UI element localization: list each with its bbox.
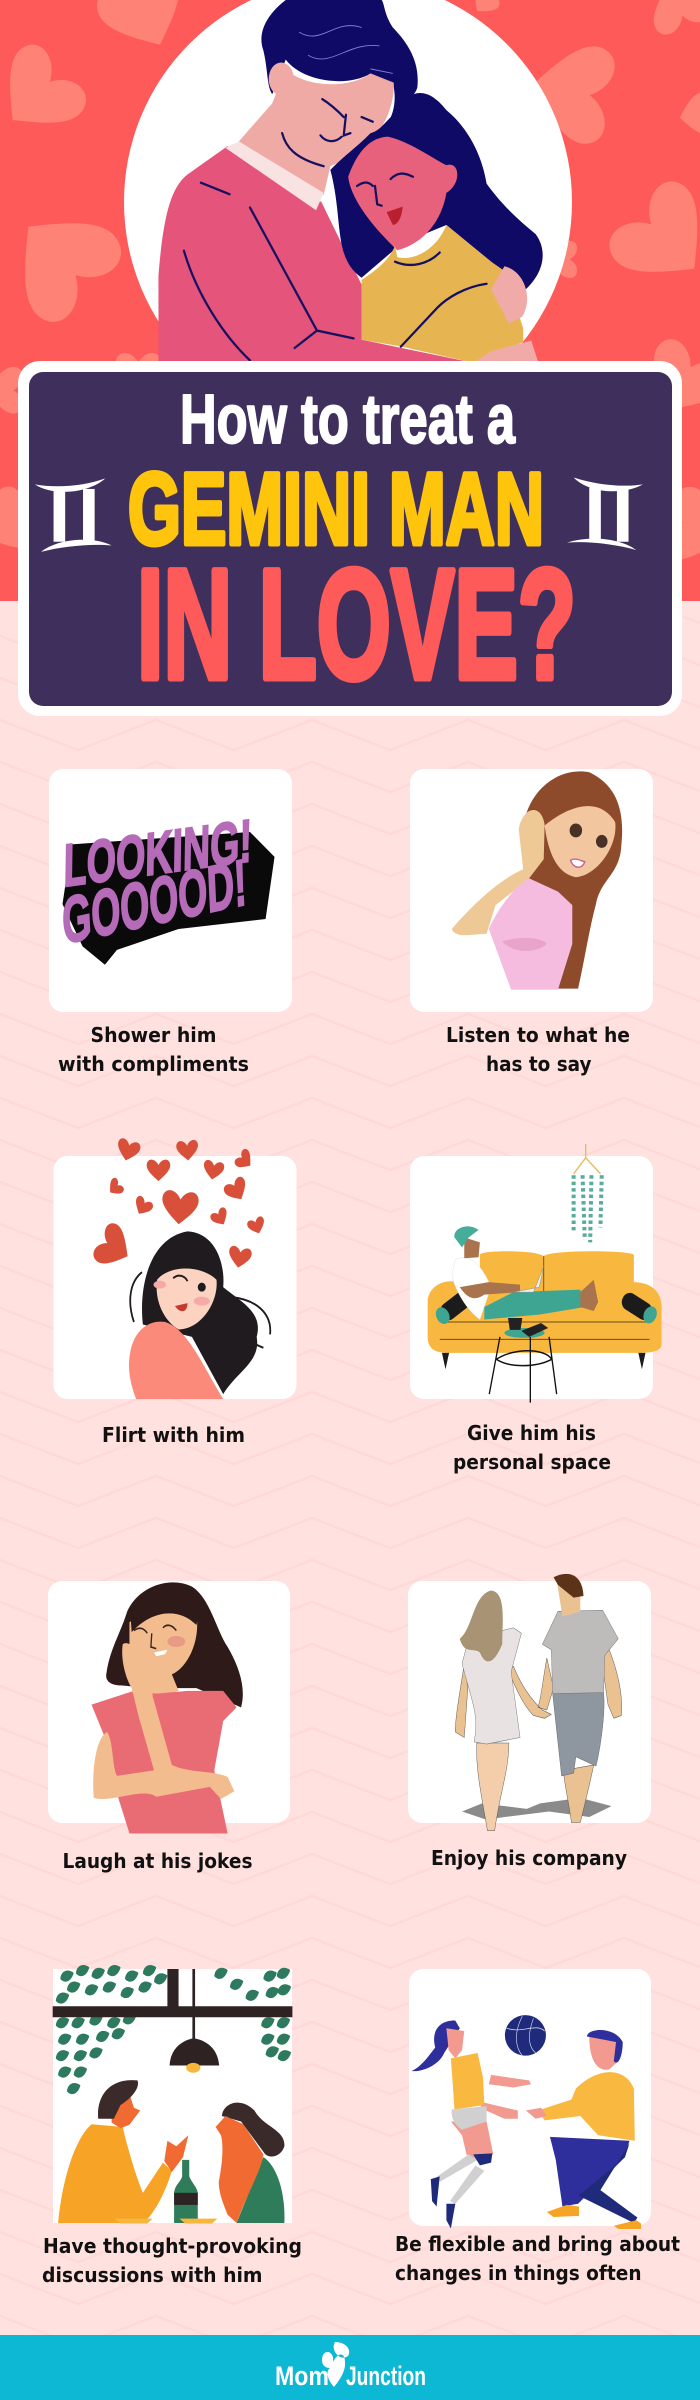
man's hair strands xyxy=(299,26,393,73)
face xyxy=(157,1268,217,1329)
line details xyxy=(184,99,487,360)
illustration: playing volleyball xyxy=(412,2015,641,2229)
bottle xyxy=(174,2160,198,2223)
caption: Have thought-provoking discussions with him: Have thought-provoking xyxy=(43,2234,302,2258)
card: company xyxy=(408,1574,651,1831)
header red background with hearts xyxy=(0,0,700,601)
card: compliments xyxy=(49,769,292,1012)
hanging plant xyxy=(574,1175,602,1242)
man xyxy=(452,1258,491,1319)
table xyxy=(504,1328,545,1338)
man's hands xyxy=(473,266,538,363)
illustration: man on sofa xyxy=(428,1144,662,1403)
caption: Listen to what he has to say: has to say xyxy=(486,1052,592,1076)
sofa legs xyxy=(442,1353,645,1369)
card: personal space xyxy=(410,1144,662,1403)
card: flirt xyxy=(54,1137,296,1399)
caption: Flirt with him: Flirt with him xyxy=(102,1423,245,1447)
caption: Listen to what he has to say: Listen to what he xyxy=(446,1023,630,1047)
icon: gemini symbol left xyxy=(35,478,112,552)
icon: gemini symbol right xyxy=(567,477,643,550)
caption: Be flexible and bring about changes in things often: changes in things often xyxy=(395,2261,642,2285)
man's ear xyxy=(269,62,294,95)
panel fill xyxy=(29,372,672,706)
card: flexible xyxy=(409,1969,651,2229)
illustration: Looking Goood lettering: LOOKING! xyxy=(63,807,253,900)
illustration: Looking Goood lettering: GOOOOD! xyxy=(61,846,248,959)
sweater xyxy=(129,1322,223,1399)
title line 1: How to treat a xyxy=(180,380,516,458)
title panel xyxy=(18,361,682,716)
cushions xyxy=(433,1288,473,1327)
man xyxy=(58,2124,172,2223)
caption: Listen to what he has to say xyxy=(446,1023,630,1076)
woman's face xyxy=(348,137,457,250)
foliage xyxy=(54,1962,293,2096)
illustration: couple walking xyxy=(455,1574,622,1831)
caption: Have thought-provoking discussions with him xyxy=(42,2234,302,2287)
caption: Enjoy his company: Enjoy his company xyxy=(431,1846,627,1870)
caption: Be flexible and bring about changes in things often xyxy=(395,2232,680,2285)
girl xyxy=(412,2021,460,2071)
ball xyxy=(505,2015,546,2056)
card: laugh xyxy=(48,1581,290,1834)
tip captions xyxy=(42,1023,680,2287)
woman xyxy=(237,2157,284,2223)
man's hair back xyxy=(261,0,418,122)
card: discussions xyxy=(53,1962,293,2224)
logo mother and child icon xyxy=(322,2342,349,2387)
illustration: flirty woman with hearts xyxy=(91,1137,270,1399)
caption: Laugh at his jokes: Laugh at his jokes xyxy=(62,1849,252,1873)
woman's sweater xyxy=(362,225,523,363)
illustration: woman listening xyxy=(452,771,622,990)
caption: Shower him with compliments: with compliments xyxy=(58,1052,249,1076)
man's face and neck xyxy=(239,69,394,195)
card: listen xyxy=(410,769,653,1012)
caption: Give him his personal space xyxy=(453,1421,611,1474)
tips row 1 and 2 illustrations xyxy=(49,769,662,1403)
caption: Give him his personal space: Give him his xyxy=(467,1421,596,1445)
logo text Junction: Junction xyxy=(346,2361,426,2391)
caption: Have thought-provoking discussions with him: discussions with him xyxy=(42,2263,262,2287)
illustration: Looking Goood lettering xyxy=(61,807,275,965)
beam and lamp xyxy=(53,1969,292,2066)
illustration: laughing woman xyxy=(92,1582,243,1834)
hair xyxy=(142,1231,258,1394)
tips row 3 and 4 illustrations xyxy=(48,1574,651,2229)
footer bar xyxy=(0,2335,700,2400)
woman's mouth xyxy=(387,207,403,225)
man's collar xyxy=(225,141,324,210)
caption: Be flexible and bring about changes in things often: Be flexible and bring about xyxy=(395,2232,680,2256)
logo: MomJunction xyxy=(275,2342,426,2391)
hearts xyxy=(91,1137,267,1275)
caption: Shower him with compliments: Shower him xyxy=(90,1023,216,1047)
illustration: couple at cafe table xyxy=(53,1962,293,2224)
white circle behind couple xyxy=(124,0,572,426)
sofa xyxy=(428,1251,662,1353)
logo text Mom: Mom xyxy=(275,2361,329,2391)
man xyxy=(550,2137,629,2207)
panel border xyxy=(18,361,682,716)
man's sweater xyxy=(158,146,473,363)
caption: Shower him with compliments xyxy=(58,1023,249,1076)
caption: Give him his personal space: personal space xyxy=(453,1450,611,1474)
hair strands xyxy=(130,1272,270,1348)
plates xyxy=(115,2219,217,2224)
illustration: embracing couple xyxy=(158,0,543,363)
woman's hair xyxy=(330,93,543,292)
